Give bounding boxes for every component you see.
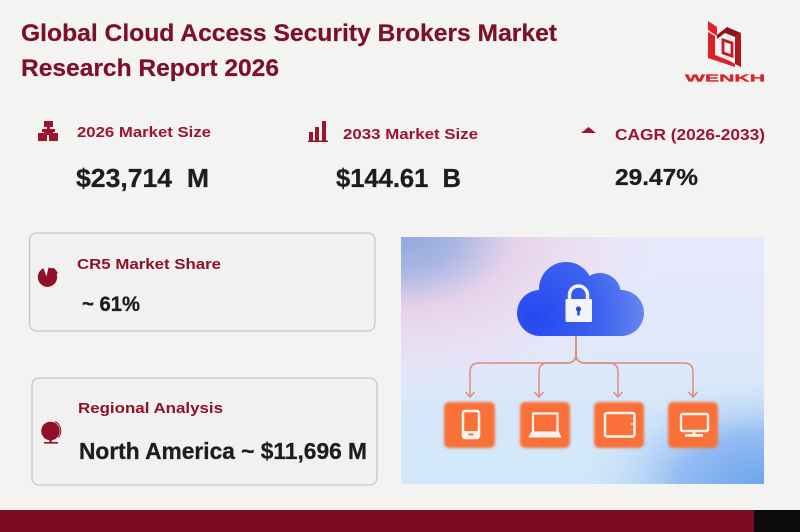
title: Research Report 2026 [21, 55, 279, 82]
panel: CR5 market share [30, 233, 375, 331]
illustration: cloud security [401, 237, 764, 484]
stat: 2033 market size [308, 121, 478, 193]
footer band [0, 510, 800, 532]
stat: CAGR: 29.47% [615, 164, 698, 190]
device tile: phone [444, 402, 495, 448]
panel: CR5 market share: CR5 Market Share [77, 256, 221, 273]
stat: 2033 market size: $144.61 B [336, 163, 461, 193]
stat: 2026 market size: 2026 Market Size [77, 124, 211, 141]
title [21, 20, 557, 82]
panel: CR5 market share: ~ 61% [82, 293, 140, 316]
panel: regional analysis [32, 378, 377, 485]
device tile: monitor [668, 402, 718, 448]
panel: regional analysis: Regional Analysis [78, 400, 223, 417]
panel: regional analysis: North America ~ $11,696 M [79, 438, 367, 464]
device tile: laptop [520, 402, 570, 448]
icon: up triangle [581, 127, 596, 133]
stat: CAGR: CAGR (2026-2033) [615, 127, 765, 144]
icon: bar chart [308, 121, 328, 142]
icon: hierarchy [38, 121, 58, 141]
title: Global Cloud Access Security Brokers Market [21, 20, 557, 47]
logo: WENKH: WENKH [685, 72, 765, 84]
logo: WENKH [685, 21, 765, 84]
icon: cloud with padlock [517, 262, 644, 336]
icon: globe [41, 422, 61, 444]
stat: CAGR [581, 127, 765, 190]
icon: pie chart [38, 268, 58, 287]
device tile: tablet [594, 402, 644, 448]
stat: 2033 market size: 2033 Market Size [343, 126, 478, 143]
stat: 2026 market size [38, 121, 211, 193]
connector arrows [466, 336, 698, 397]
stat: 2026 market size: $23,714 M [76, 163, 209, 193]
